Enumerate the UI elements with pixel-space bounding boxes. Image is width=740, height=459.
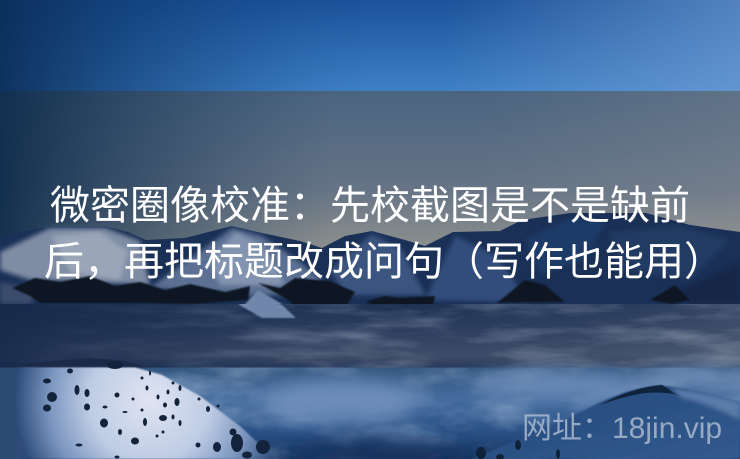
background: cloud layer inside dark band — [0, 304, 740, 368]
watermark url: 网址：18jin.vip — [522, 412, 722, 445]
title — [44, 184, 724, 284]
background: snowy mountain range — [0, 213, 740, 318]
background: upper clear sky — [0, 0, 740, 91]
title: 后，再把标题改成问句（写作也能用） — [44, 240, 724, 284]
background: sea of clouds — [0, 368, 740, 459]
background: right foreground hill — [472, 385, 740, 459]
background: sky under dark band — [0, 91, 740, 256]
title: 微密圈像校准：先校截图是不是缺前 — [50, 184, 690, 228]
background: left foreground snowy hill with trees — [0, 361, 275, 459]
